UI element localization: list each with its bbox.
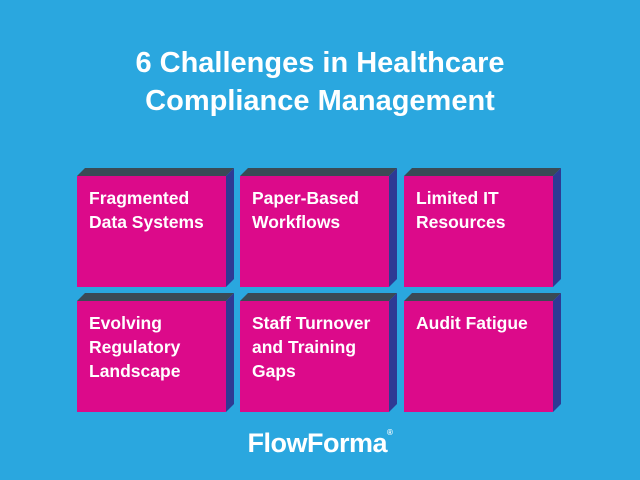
box: fragmented data systems: Fragmented Data Systems	[89, 188, 204, 232]
title	[135, 47, 505, 117]
box: audit fatigue	[404, 293, 561, 412]
box: paper-based workflows	[240, 168, 397, 287]
box: limited IT resources	[404, 168, 561, 287]
title: 6 Challenges in Healthcare	[135, 47, 505, 79]
box: staff turnover	[240, 293, 397, 412]
box: limited IT resources: Limited IT Resources	[416, 188, 506, 232]
box: evolving regulatory landscape: Evolving Regulatory Landscape	[89, 313, 180, 381]
logo: FlowForma®	[248, 428, 392, 458]
box: audit fatigue: Audit Fatigue	[416, 313, 528, 333]
box: staff turnover: Staff Turnover and Training Gaps	[252, 313, 370, 381]
box: paper-based workflows: Paper-Based Workflows	[252, 188, 359, 232]
box: fragmented data systems	[77, 168, 234, 287]
title: Compliance Management	[145, 85, 495, 117]
box: evolving regulatory landscape	[77, 293, 234, 412]
